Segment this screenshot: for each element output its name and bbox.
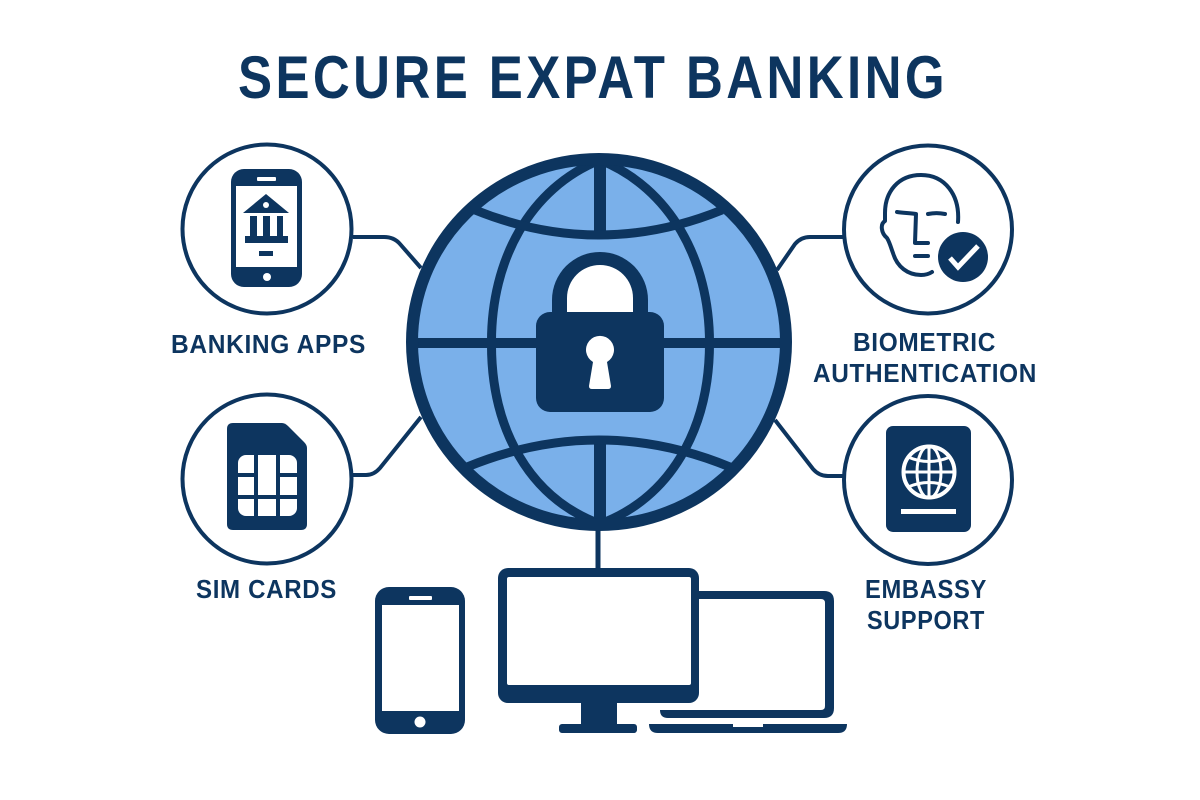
label: banking apps: BANKING APPS [171,329,366,359]
panel: biometric authentication: AUTHENTICATION [813,358,1037,388]
label: biometric authentication: BIOMETRIC [853,327,996,357]
connector lines [353,237,843,570]
panel: banking apps [171,144,366,359]
central globe with padlock [412,155,786,528]
icon: laptop [649,591,847,733]
icon: phone with bank [231,169,302,287]
panel: embassy support [844,396,1012,635]
icon: sim card [227,423,307,530]
panel: embassy support: SUPPORT [867,605,985,635]
label: embassy support: EMBASSY [865,574,987,604]
icon: smartphone [375,587,465,734]
icon: face with check badge [882,175,988,282]
icon: desktop monitor [498,568,699,733]
label: sim cards: SIM CARDS [196,574,337,604]
panel: sim cards [182,394,352,604]
icon: passport [886,426,971,532]
title: SECURE EXPAT BANKING [238,44,948,111]
panel: biometric authentication [813,146,1037,388]
icon: padlock [536,252,664,412]
